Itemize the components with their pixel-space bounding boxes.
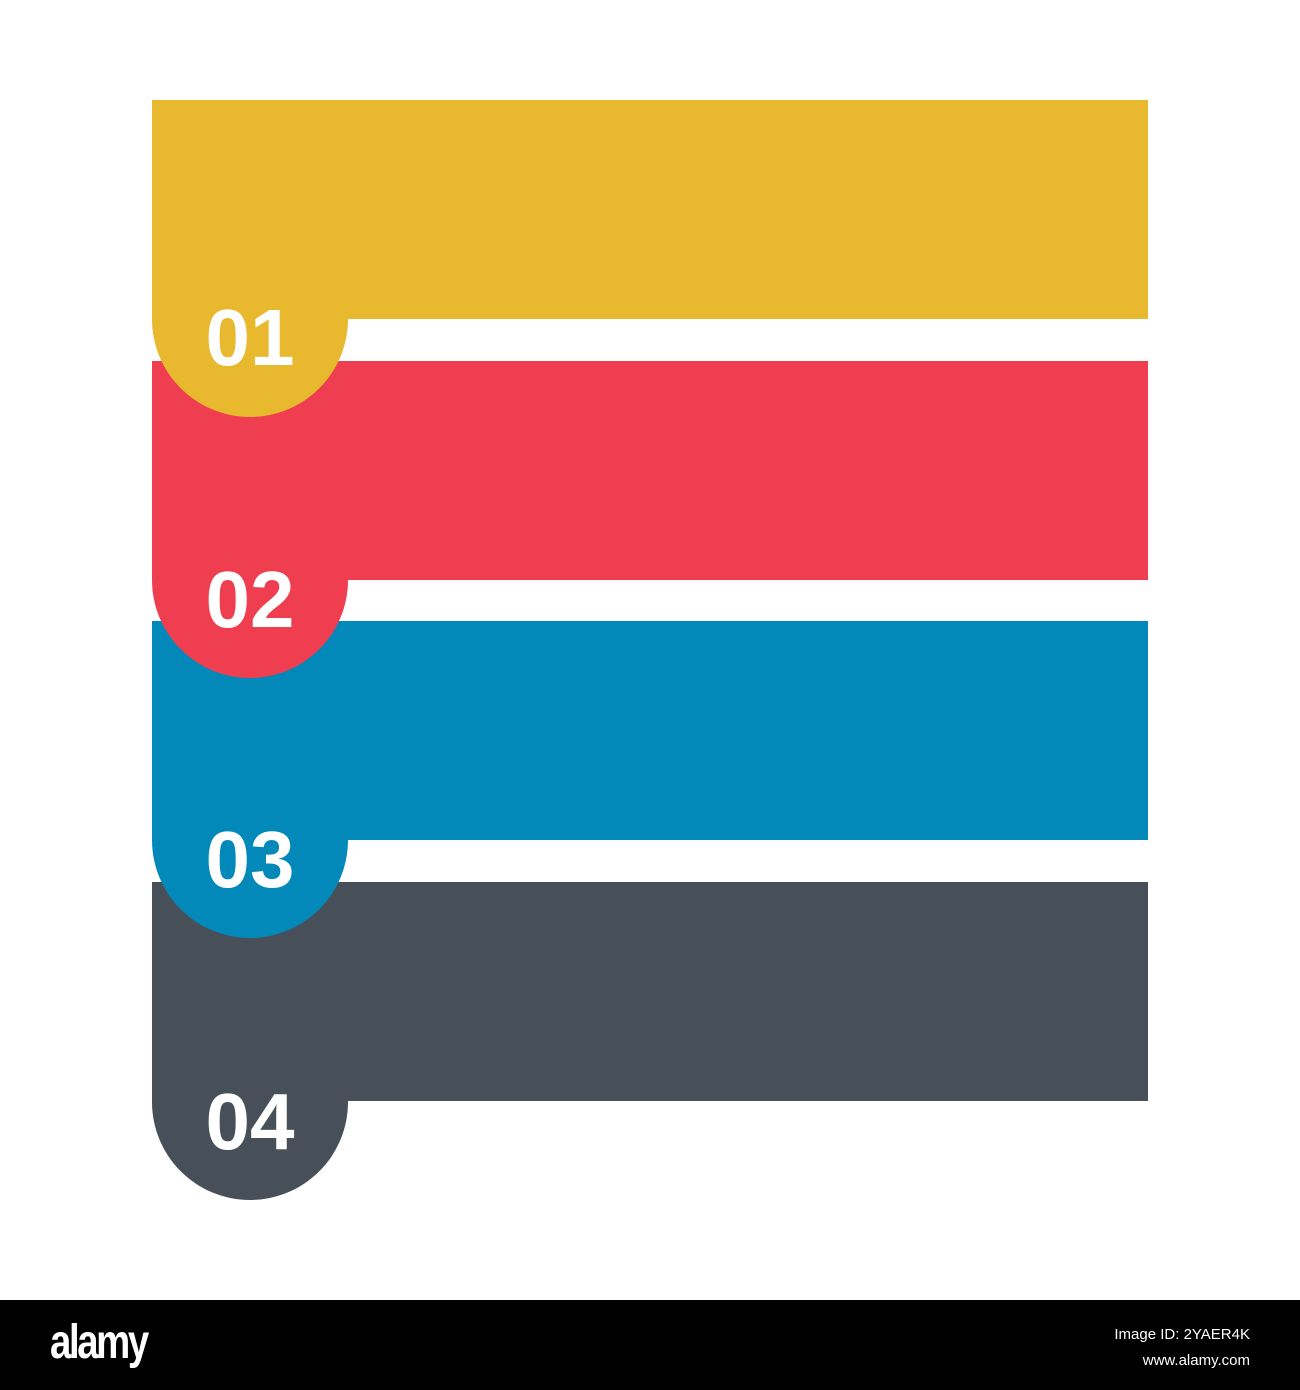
footer image id: www.alamy.com	[1143, 1352, 1250, 1369]
footer image id	[1114, 1326, 1250, 1369]
footer image id: Image ID: 2YAER4K	[1114, 1326, 1250, 1343]
step 02: red bar: 02	[206, 555, 294, 644]
step 03: blue bar: 03	[206, 815, 294, 904]
step 01: yellow bar: 01	[206, 293, 294, 382]
footer: black strip	[0, 1300, 1300, 1390]
footer logo: alamy	[50, 1316, 147, 1369]
step 04: dark bar: 04	[206, 1077, 294, 1166]
